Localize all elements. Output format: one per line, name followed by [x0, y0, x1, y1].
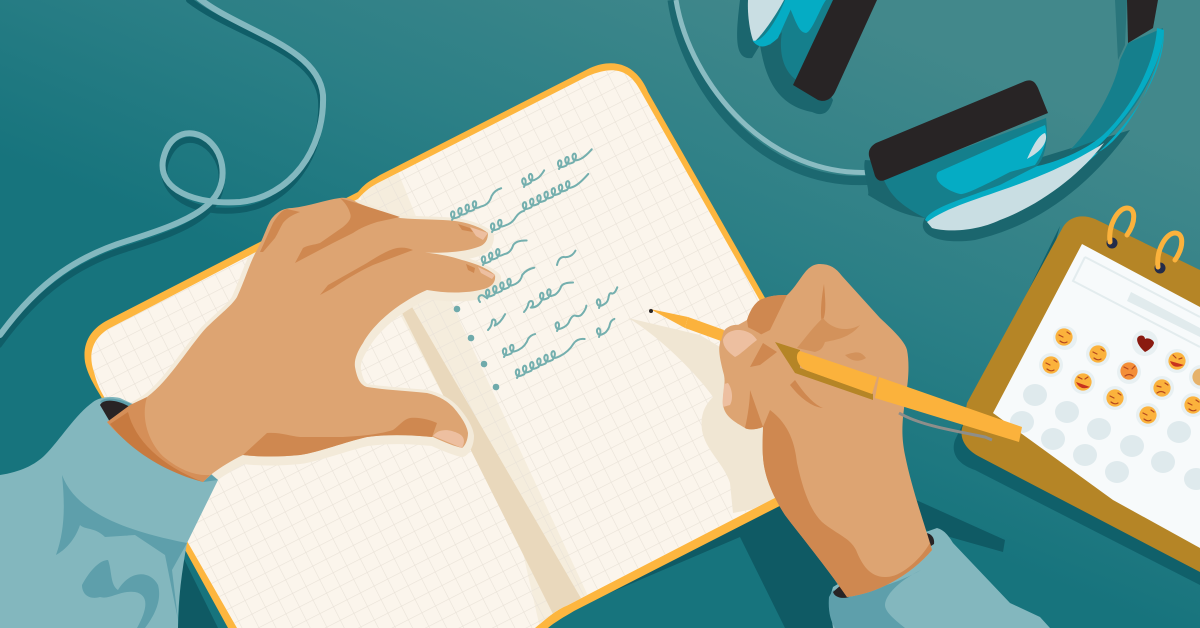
thumbnail: [433, 430, 464, 448]
shadow: earcups: [737, 0, 833, 114]
clipboard shadow: [954, 226, 1200, 585]
finger creases: [821, 284, 825, 322]
finger behind shading: [747, 295, 787, 340]
clipboard board: [962, 216, 1200, 572]
shadow: notebook and forearm on desk: [178, 495, 1005, 628]
calendar paper: [993, 244, 1200, 548]
pen middle barrel: [797, 351, 877, 394]
pen: [649, 309, 1022, 442]
emoji halos: [1039, 326, 1200, 427]
headband inner shadow: [1115, 0, 1127, 60]
palm crease: [790, 380, 823, 408]
pen clip: [899, 413, 992, 440]
lower finger nail: [723, 383, 732, 407]
knuckle shading: [260, 209, 300, 252]
upper earpad: [793, 0, 877, 101]
right hand: [719, 264, 932, 597]
shadow: left hand on page: [107, 201, 495, 485]
upper earcup: [748, 0, 840, 82]
handwriting lines: [449, 146, 621, 378]
emoji features: [1046, 332, 1199, 421]
left sleeve: [0, 397, 218, 628]
calendar header box: [1073, 257, 1200, 347]
thumb knuckle shade: [750, 343, 777, 367]
sleeve folds: [56, 475, 187, 620]
pen front barrel: [685, 317, 724, 341]
lower earpad: [869, 80, 1048, 181]
spine band: [398, 300, 582, 628]
palm side shading: [763, 410, 932, 597]
hand base: [719, 264, 932, 597]
bullet points: [454, 306, 499, 390]
binder ring right: [1154, 233, 1182, 274]
binder ring left: [1106, 208, 1134, 248]
left hand: [107, 198, 495, 482]
headphone cable shadow: [672, 0, 875, 181]
hand base: [107, 198, 495, 482]
notebook cover edge: [84, 63, 860, 628]
notebook pages with grid: [91, 70, 775, 628]
lower earcup: [883, 118, 1047, 218]
cuff opening inner: [100, 398, 218, 482]
sleeve dark liner: [100, 401, 130, 422]
fingertip nails: [470, 227, 488, 240]
finger crease: [320, 248, 413, 295]
pen gold underside: [775, 342, 873, 400]
calendar title bar: [1127, 292, 1200, 337]
headband black strip: [1127, 0, 1158, 43]
heart sticker: [1137, 336, 1154, 352]
notebook: [84, 63, 780, 628]
gutter shading: [358, 172, 590, 628]
headphones: [672, 0, 1164, 241]
pen rear barrel: [875, 377, 1022, 442]
empty day cells: [1010, 384, 1200, 490]
wrist shading: [107, 397, 210, 482]
thumb underside shading: [243, 418, 437, 456]
thumbnail: [723, 330, 757, 357]
emoji open mouths: [1076, 361, 1184, 388]
calendar clipboard: [954, 208, 1200, 585]
right sleeve: [829, 528, 1050, 628]
headband right arm: [1070, 28, 1163, 150]
shadow: right hand and pen on page: [628, 318, 774, 513]
headphone cable: [676, 0, 875, 172]
cable: left cord with loop: [0, 0, 323, 345]
sleeve dark liner: [833, 585, 849, 598]
emoji faces: [1042, 328, 1200, 424]
pen tip: [650, 309, 688, 328]
thumb: [720, 325, 790, 387]
